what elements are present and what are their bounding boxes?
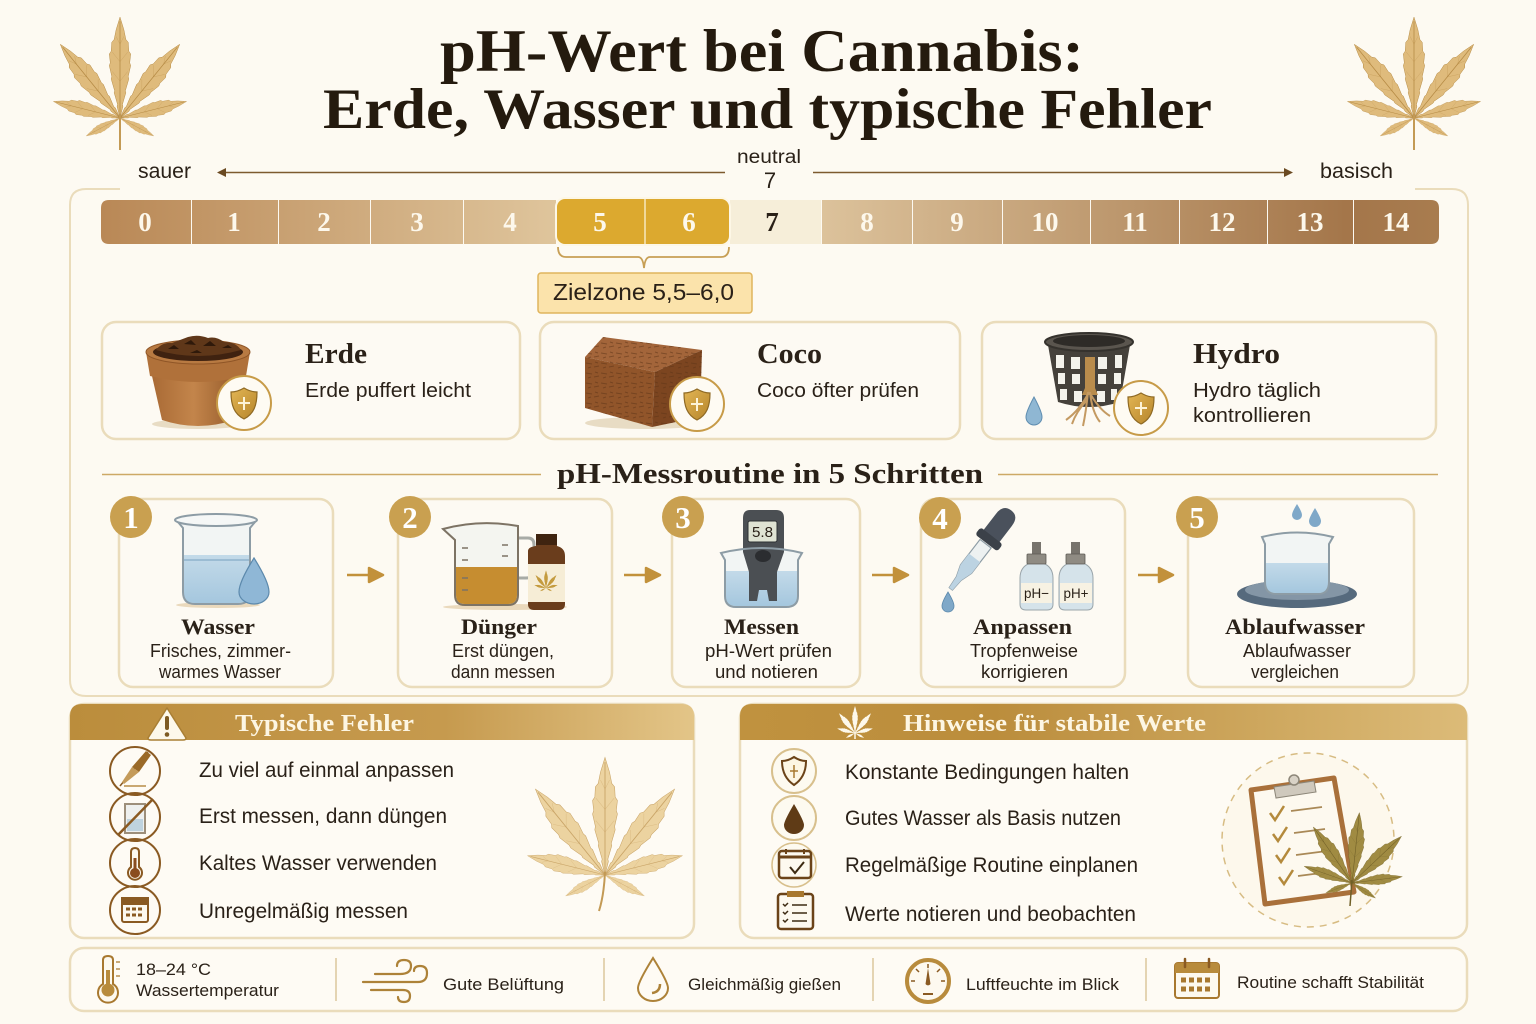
pH axis labels: neutral (737, 147, 801, 168)
scale numbers: 11 (1122, 207, 1148, 237)
icon: cannabis leaf right (1346, 17, 1482, 150)
scale numbers: 13 (1296, 207, 1324, 237)
text: Wassertemperatur: Wassertemperatur (136, 981, 279, 1000)
text: Dünger description: Erst düngen, (452, 641, 554, 661)
icon: pH+ bottle (1059, 542, 1093, 610)
label: Messen: Messen (724, 614, 799, 639)
icon: pH meter in beaker: 5.8 (752, 524, 773, 541)
text: Wassertemperatur (136, 960, 279, 1000)
scale numbers: 6 (682, 207, 696, 237)
badge 2 (389, 496, 431, 538)
text: Wasser description (150, 641, 291, 682)
icon: warning triangle (148, 708, 186, 740)
panel header (70, 704, 694, 740)
text: Hinweis 1: Konstante Bedingungen halten (845, 761, 1129, 784)
icon: gauge (907, 960, 949, 1002)
arrow 2 (624, 568, 660, 582)
text: Anpassen description: Tropfenweise (970, 641, 1078, 661)
badge 3: 3 (675, 500, 691, 535)
badge 5 (1176, 496, 1218, 538)
icon: white leaf (837, 706, 873, 739)
icon: pH meter in beaker (721, 510, 802, 607)
heading: Hinweise: Hinweise für stabile Werte (903, 711, 1206, 737)
title: pH-Wert bei Cannabis: (440, 18, 1084, 84)
arrow 4 (1138, 568, 1173, 582)
icon: net pot with roots (1045, 333, 1133, 426)
text: Fehler 2: Erst messen, dann düngen (199, 805, 447, 828)
icon: calendar check (772, 843, 816, 887)
icon: shield (772, 749, 816, 793)
icon: drop (638, 958, 668, 1001)
scale numbers: 12 (1208, 207, 1236, 237)
icon: checklist (778, 891, 813, 929)
heading: measuring routine: pH-Messroutine in 5 Schritten (557, 458, 983, 490)
step 4: Anpassen (919, 497, 1125, 687)
icon: soil pot (146, 336, 250, 429)
scale numbers: 0 (138, 207, 152, 237)
icon: shield badge (1114, 381, 1168, 435)
text: Hinweis 3: Regelmäßige Routine einplanen (845, 854, 1138, 877)
arrow 1 (347, 568, 383, 582)
icon: dropper (940, 502, 1022, 612)
text: Wasser description: Frisches, zimmer- (150, 641, 291, 661)
text: Coco description: Coco öfter prüfen (757, 380, 919, 402)
icon: wind (363, 960, 427, 1002)
icon: dark drop (772, 796, 816, 840)
step 3: Messen (662, 496, 860, 687)
text: Hinweis 2: Gutes Wasser als Basis nutzen (845, 807, 1121, 830)
text: Hydro description: kontrollieren (1193, 405, 1311, 427)
scale numbers: 2 (317, 207, 331, 237)
badge 4 (919, 497, 961, 539)
text: Fehler 4: Unregelmäßig messen (199, 900, 408, 923)
pH scale bar (101, 198, 1439, 245)
label: Dünger: Dünger (461, 614, 537, 639)
footer panel (70, 948, 1467, 1011)
pH axis labels: 7 (764, 168, 776, 193)
panel: Coco (540, 322, 960, 439)
icon: shield badge (217, 376, 271, 430)
text: Anpassen description: korrigieren (981, 662, 1068, 682)
scale numbers: 1 (227, 207, 241, 237)
icon: pH- bottle (1020, 542, 1053, 610)
callout: Zielzone: Zielzone 5,5–6,0 (553, 279, 734, 305)
panel header (740, 704, 1467, 740)
icon: beaker with drop (175, 514, 269, 608)
step 2: Dünger (389, 496, 612, 687)
text: Dünger description: dann messen (451, 662, 555, 682)
icon: coco block (585, 337, 705, 429)
text: Routine schafft Stabilität: Routine schafft Stabilität (1237, 973, 1424, 992)
label: Erde: Erde (305, 339, 367, 370)
title: Erde, Wasser und typische Fehler (323, 78, 1212, 141)
icon: water drop (1026, 397, 1042, 425)
text: Luftfeuchte: Luftfeuchte im Blick (966, 975, 1120, 994)
scale numbers: 10 (1032, 207, 1058, 237)
text: Erde description: Erde puffert leicht (305, 380, 471, 402)
scale numbers (138, 207, 1410, 237)
arrow 3 (872, 568, 908, 582)
scale numbers: 4 (503, 207, 517, 237)
badge 5: 5 (1189, 500, 1205, 535)
step 5: Ablaufwasser (1176, 496, 1414, 687)
label: Hydro: Hydro (1193, 339, 1280, 370)
label: Anpassen: Anpassen (973, 614, 1072, 639)
text: Ablaufwasser description: Ablaufwasser (1243, 641, 1351, 661)
scale numbers: 14 (1382, 207, 1410, 237)
scale numbers: 8 (860, 207, 874, 237)
panel: Hydro (982, 322, 1436, 439)
target zone 5–6 (556, 198, 730, 245)
panel: Hinweise für stabile Werte (740, 704, 1467, 938)
text: Fehler 1: Zu viel auf einmal anpassen (199, 759, 454, 782)
icon: pH- bottle: pH− (1024, 585, 1049, 601)
label: Coco: Coco (757, 339, 822, 370)
text: Fehler 3: Kaltes Wasser verwenden (199, 852, 437, 875)
text: Gute Belüftung: Gute Belüftung (443, 975, 564, 994)
icon: jug with fertilizer bottle (443, 523, 567, 610)
icon: thermometer (98, 956, 120, 1003)
step 1: Wasser (110, 496, 333, 687)
badge 2: 2 (402, 500, 418, 535)
text: Anpassen description (970, 641, 1078, 682)
icon: no beaker (110, 793, 160, 841)
heading: Typische Fehler: Typische Fehler (235, 711, 414, 737)
scale numbers: 7 (765, 207, 779, 237)
panel: Typische Fehler (70, 704, 694, 938)
text: Hydro description: Hydro täglich (1193, 380, 1321, 402)
pH axis labels: basisch (1320, 160, 1393, 183)
text: Ablaufwasser description (1243, 641, 1351, 682)
text: Messen description: und notieren (715, 662, 818, 682)
text: Hydro description (1193, 380, 1321, 427)
main frame panel (70, 189, 1468, 696)
badge 4: 4 (932, 501, 948, 536)
icon: large cannabis leaf (525, 757, 685, 911)
callout: Zielzone (538, 273, 752, 313)
text: Hinweis 4: Werte notieren und beobachten (845, 903, 1136, 926)
icon: shield badge (670, 377, 724, 431)
label: Wasser: Wasser (181, 614, 255, 639)
icon: thermometer (110, 839, 160, 887)
scale numbers: 3 (410, 207, 424, 237)
badge 1 (110, 496, 152, 538)
scale numbers: 5 (593, 207, 607, 237)
pH axis labels: sauer (138, 160, 191, 183)
icon: pH+ bottle: pH+ (1064, 585, 1088, 601)
icon: no dropper (110, 747, 160, 795)
illustration: clipboard with leaf (1222, 753, 1410, 927)
title (323, 18, 1212, 141)
icon: calendar (1175, 959, 1219, 998)
panel: Erde (102, 322, 520, 439)
badge 3 (662, 496, 704, 538)
icon: beaker on tray with drops (1237, 504, 1357, 608)
text: Dünger description (451, 641, 555, 682)
text: Messen description (705, 641, 832, 682)
scale numbers: 9 (950, 207, 964, 237)
target zone bracket (558, 247, 729, 268)
text: Messen description: pH-Wert prüfen (705, 641, 832, 661)
icon: calendar (110, 886, 160, 934)
pH axis labels (138, 147, 1393, 193)
text: Wassertemperatur: 18–24 °C (136, 960, 211, 979)
text: Ablaufwasser description: vergleichen (1251, 662, 1339, 682)
text: Wasser description: warmes Wasser (158, 662, 281, 682)
icon: cannabis leaf left (52, 17, 188, 150)
text: Gleichmäßig gießen: Gleichmäßig gießen (688, 975, 841, 994)
label: Ablaufwasser: Ablaufwasser (1225, 614, 1365, 639)
badge 1: 1 (123, 500, 139, 535)
